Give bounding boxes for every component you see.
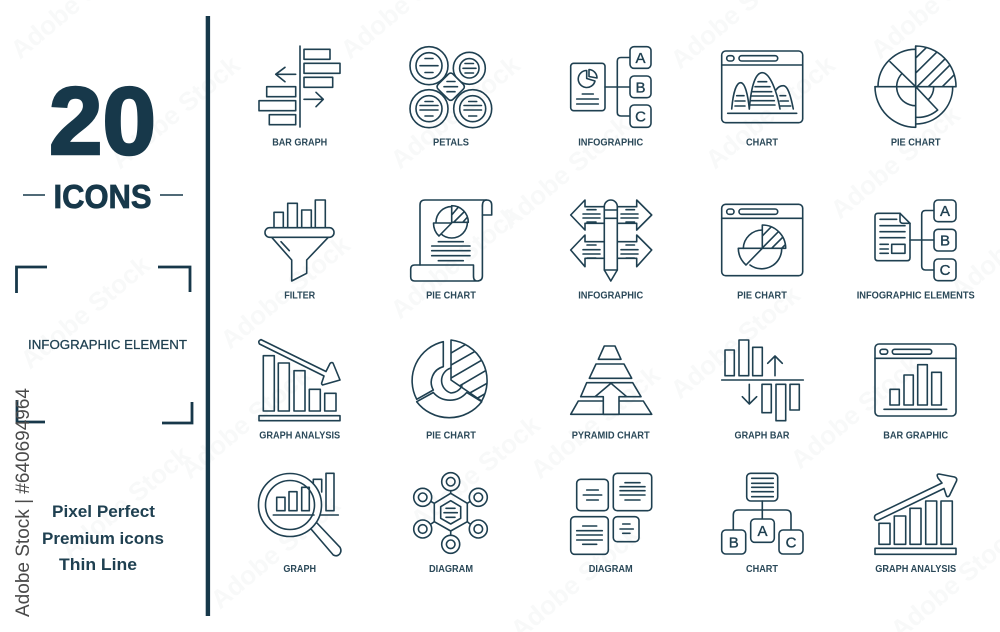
panel: infographic elements <box>857 200 975 302</box>
label: FILTER <box>284 291 316 302</box>
icon: document with abc branches: C <box>940 262 951 279</box>
tagline text block: Pixel Perfect <box>52 502 155 521</box>
icon: hatched pie chart <box>411 339 488 418</box>
panel: graph analysis down <box>259 340 340 442</box>
icon: infographic doc abc: B <box>635 79 646 96</box>
label: PIE CHART <box>426 291 476 302</box>
icon: pie chart <box>874 45 957 128</box>
icon: filter funnel <box>265 200 334 281</box>
panel: pie chart window <box>722 204 803 302</box>
label: BAR GRAPHIC <box>883 431 948 442</box>
icon: bar graph <box>259 46 340 127</box>
icon: pyramid <box>571 346 652 414</box>
icon: text boxes <box>571 473 652 554</box>
icon: infographic doc abc <box>571 47 651 127</box>
label: PETALS <box>433 138 469 148</box>
panel: pyramid chart <box>571 346 652 442</box>
text: Adobe Stock <box>105 49 246 175</box>
panel: petals <box>410 47 492 148</box>
label: CHART <box>746 138 778 148</box>
label: DIAGRAM <box>589 564 633 575</box>
label: GRAPH ANALYSIS <box>259 431 340 442</box>
panel: bar graphic <box>875 344 956 442</box>
label: PYRAMID CHART <box>572 431 650 442</box>
icon: hexagon hub with satellites <box>414 473 487 553</box>
frame brackets around subtitle <box>16 267 192 423</box>
icon: infographic doc abc: C <box>635 108 646 126</box>
label: GRAPH ANALYSIS <box>875 564 956 575</box>
icon: abc hierarchy <box>722 473 803 554</box>
tagline text block: Premium icons <box>42 529 164 548</box>
label: BAR GRAPH <box>272 138 327 148</box>
panel: infographic pencil arrows <box>571 200 652 302</box>
label: INFOGRAPHIC <box>578 291 643 302</box>
text: Adobe Stock <box>175 359 316 485</box>
icon: pencil with arrows <box>571 200 652 281</box>
text: Adobe Stock <box>385 199 526 325</box>
label: PIE CHART <box>426 431 476 442</box>
panel: filter <box>265 200 334 302</box>
icon: rising bars with arrow <box>874 474 957 554</box>
label: INFOGRAPHIC ELEMENTS <box>857 291 975 302</box>
vertical divider bar <box>206 16 210 616</box>
panel: infographic doc abc <box>571 47 651 149</box>
text: Adobe Stock <box>15 249 156 375</box>
icon: abc hierarchy: B <box>729 534 739 552</box>
panel: left title column <box>16 68 192 574</box>
subtitle: infographic element: INFOGRAPHIC ELEMENT <box>28 337 187 352</box>
icon: document with abc branches: B <box>940 232 950 250</box>
panel: pie chart 1 <box>874 45 957 146</box>
icon: document with abc branches: A <box>940 203 950 220</box>
icon: scroll with pie chart <box>411 200 492 281</box>
text: Adobe Stock <box>215 229 356 355</box>
icon: chart window <box>722 51 803 123</box>
icon: petals <box>410 47 492 128</box>
panel: pie chart scroll <box>411 200 492 302</box>
text: Adobe Stock <box>825 99 966 225</box>
panel: graph analysis up <box>874 474 957 575</box>
icon: document with abc branches <box>875 200 956 281</box>
icon: abc hierarchy: A <box>757 523 768 540</box>
icon: abc hierarchy: C <box>786 534 797 552</box>
text: Adobe Stock <box>495 109 636 235</box>
text: Adobe Stock <box>205 489 346 615</box>
panel: bar graph <box>259 46 340 148</box>
text: Adobe Stock <box>785 349 926 475</box>
tagline text block <box>42 502 164 574</box>
icon: infographic doc abc: A <box>635 50 646 67</box>
icon: window with bars <box>875 344 956 416</box>
icon: falling bars with arrow <box>259 340 340 421</box>
heading: 20: 20 <box>49 68 156 175</box>
tagline text block: Thin Line <box>59 555 137 574</box>
icon: up and down bars <box>722 340 803 421</box>
panel: diagram boxes <box>571 473 652 575</box>
text: Adobe Stock <box>665 279 806 405</box>
panel: pie chart 2 <box>411 339 488 438</box>
stock id vertical text: Adobe Stock | #640694964 <box>13 388 34 617</box>
label: PIE CHART <box>737 291 787 302</box>
label: DIAGRAM <box>429 564 473 575</box>
icon: magnifier over bars <box>258 473 341 556</box>
icon: window with pie chart <box>722 204 803 276</box>
panel: graph bar <box>722 340 803 442</box>
text: Adobe Stock <box>385 49 526 175</box>
panel: diagram hexagon <box>414 473 487 575</box>
panel: chart hierarchy <box>722 473 803 575</box>
label: PIE CHART <box>891 138 941 148</box>
label: CHART <box>746 564 778 575</box>
text: Adobe Stock <box>525 359 666 485</box>
label: GRAPH BAR <box>734 431 790 442</box>
label: INFOGRAPHIC <box>578 138 643 148</box>
panel: chart window <box>722 51 803 148</box>
heading: icons with side dashes: ICONS <box>54 178 152 215</box>
text: Adobe Stock <box>700 49 841 175</box>
label: GRAPH <box>283 564 316 575</box>
text: Adobe Stock <box>405 409 546 535</box>
text: Adobe Stock <box>55 439 196 565</box>
panel: graph magnifier <box>258 473 341 575</box>
